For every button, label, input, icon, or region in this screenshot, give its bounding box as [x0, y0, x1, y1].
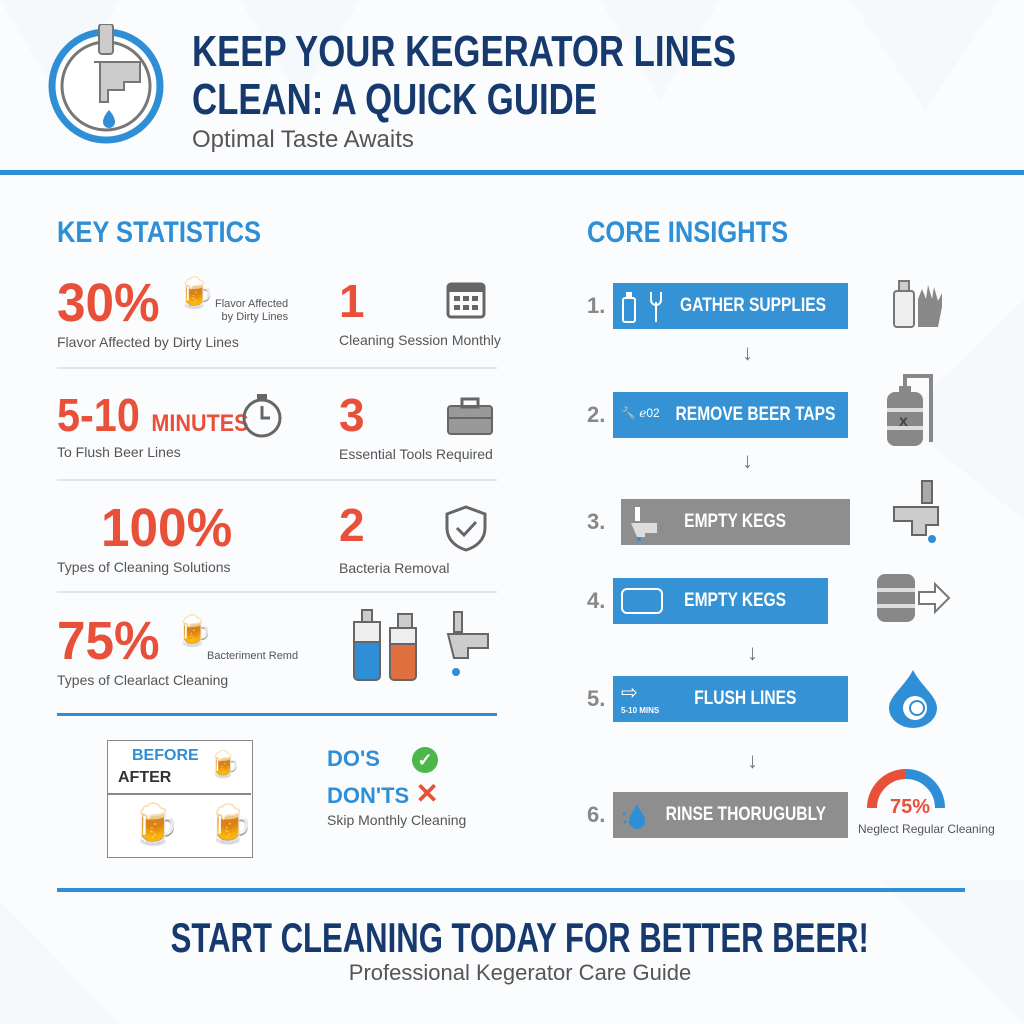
step 6: 6. — [587, 802, 605, 827]
before/after panel: BEFORE — [132, 747, 199, 764]
do's and don'ts: ✓ — [417, 750, 433, 770]
step 6: RINSE THORUGUBLY — [665, 804, 826, 825]
stat: 1: Cleaning Session Monthly — [339, 332, 501, 348]
title: Optimal Taste Awaits — [192, 126, 414, 153]
do's and don'ts: Skip Monthly Cleaning — [327, 812, 466, 828]
stat: 1: 1 — [339, 275, 365, 327]
stat: 30%: by Dirty Lines — [222, 311, 288, 323]
footer call to action: START CLEANING TODAY FOR BETTER BEER! — [171, 914, 869, 961]
stat: 30%: 🍺 — [177, 277, 214, 310]
step 5 — [587, 670, 937, 728]
stat: 2 — [339, 499, 486, 576]
step 5: 5. — [587, 686, 605, 711]
stat: 30%: 30% — [57, 273, 160, 333]
heading: core insights: CORE INSIGHTS — [587, 216, 788, 249]
do's and don'ts: DON'TS ✕ — [327, 778, 439, 809]
stat: 75%: Bacteriment Remd — [207, 650, 298, 662]
step 3 — [587, 480, 939, 545]
step 1: GATHER SUPPLIES — [680, 295, 827, 316]
before/after panel: 🍺 — [208, 749, 240, 779]
gauge 75% — [858, 769, 995, 836]
arrow: ↓ — [742, 340, 753, 365]
footer subtitle: Professional Kegerator Care Guide — [349, 960, 691, 985]
arrow: ↓ — [742, 448, 753, 473]
stat: 5-10 minutes: 5-10 MINUTES — [57, 389, 249, 441]
stat: 30% — [57, 273, 288, 350]
stat: 2: Bacteria Removal — [339, 560, 450, 576]
before/after panel — [107, 740, 253, 858]
step 2: 🔧 ℯ02 — [621, 406, 660, 420]
step 1 — [587, 280, 942, 329]
header logo icon — [48, 24, 164, 144]
stat: 75% — [57, 611, 298, 688]
stat: 3 — [339, 389, 493, 462]
stat: 100% — [57, 498, 232, 575]
stat: 75%: Types of Clearlact Cleaning — [57, 672, 228, 688]
step 1: 1. — [587, 293, 605, 318]
arrow: ↓ — [747, 640, 758, 665]
step 2: 2. — [587, 402, 605, 427]
title: KEEP YOUR KEGERATOR LINES — [192, 27, 736, 76]
do's and don'ts — [327, 746, 466, 828]
step 4: 4. — [587, 588, 605, 613]
before/after panel: AFTER — [118, 769, 171, 786]
step 4 — [587, 574, 950, 624]
icons: cleaning bottles and tap — [353, 609, 489, 681]
before/after panel: 🍺 — [130, 803, 180, 847]
title — [192, 27, 736, 153]
heading: key statistics: KEY STATISTICS — [57, 216, 261, 249]
step 5: ⇨ — [621, 682, 638, 704]
stat: 30%: Flavor Affected — [215, 298, 288, 310]
stat: 100%: 100% — [101, 498, 232, 558]
step 2: x — [899, 413, 908, 430]
stat: 3: Essential Tools Required — [339, 446, 493, 462]
stat: 100%: Types of Cleaning Solutions — [57, 559, 231, 575]
step 3: 3. — [587, 509, 605, 534]
before/after panel: 🍺 — [206, 804, 253, 846]
stat: 1 — [339, 275, 501, 348]
stat: 3: 3 — [339, 389, 365, 441]
stat: 30%: Flavor Affected by Dirty Lines — [57, 334, 239, 350]
stat: 75%: 🍺 — [175, 615, 212, 648]
do's and don'ts: DO'S — [327, 746, 380, 771]
step 3: EMPTY KEGS — [685, 511, 786, 532]
step 4: EMPTY KEGS — [685, 590, 786, 611]
step 5: FLUSH LINES — [694, 688, 797, 709]
step 2: REMOVE BEER TAPS — [676, 404, 835, 425]
title: CLEAN: A QUICK GUIDE — [192, 75, 597, 124]
stat: 2: 2 — [339, 499, 365, 551]
step 2 — [587, 374, 933, 446]
gauge 75%: Neglect Regular Cleaning — [858, 822, 995, 836]
stat: 75%: 75% — [57, 611, 160, 671]
step 6 — [587, 792, 848, 838]
step 5: 5-10 MINS — [621, 706, 659, 715]
gauge 75%: 75% — [890, 796, 930, 818]
arrow: ↓ — [747, 748, 758, 773]
stat: 5-10 minutes: To Flush Beer Lines — [57, 444, 181, 460]
stat: 5-10 minutes — [57, 389, 282, 460]
